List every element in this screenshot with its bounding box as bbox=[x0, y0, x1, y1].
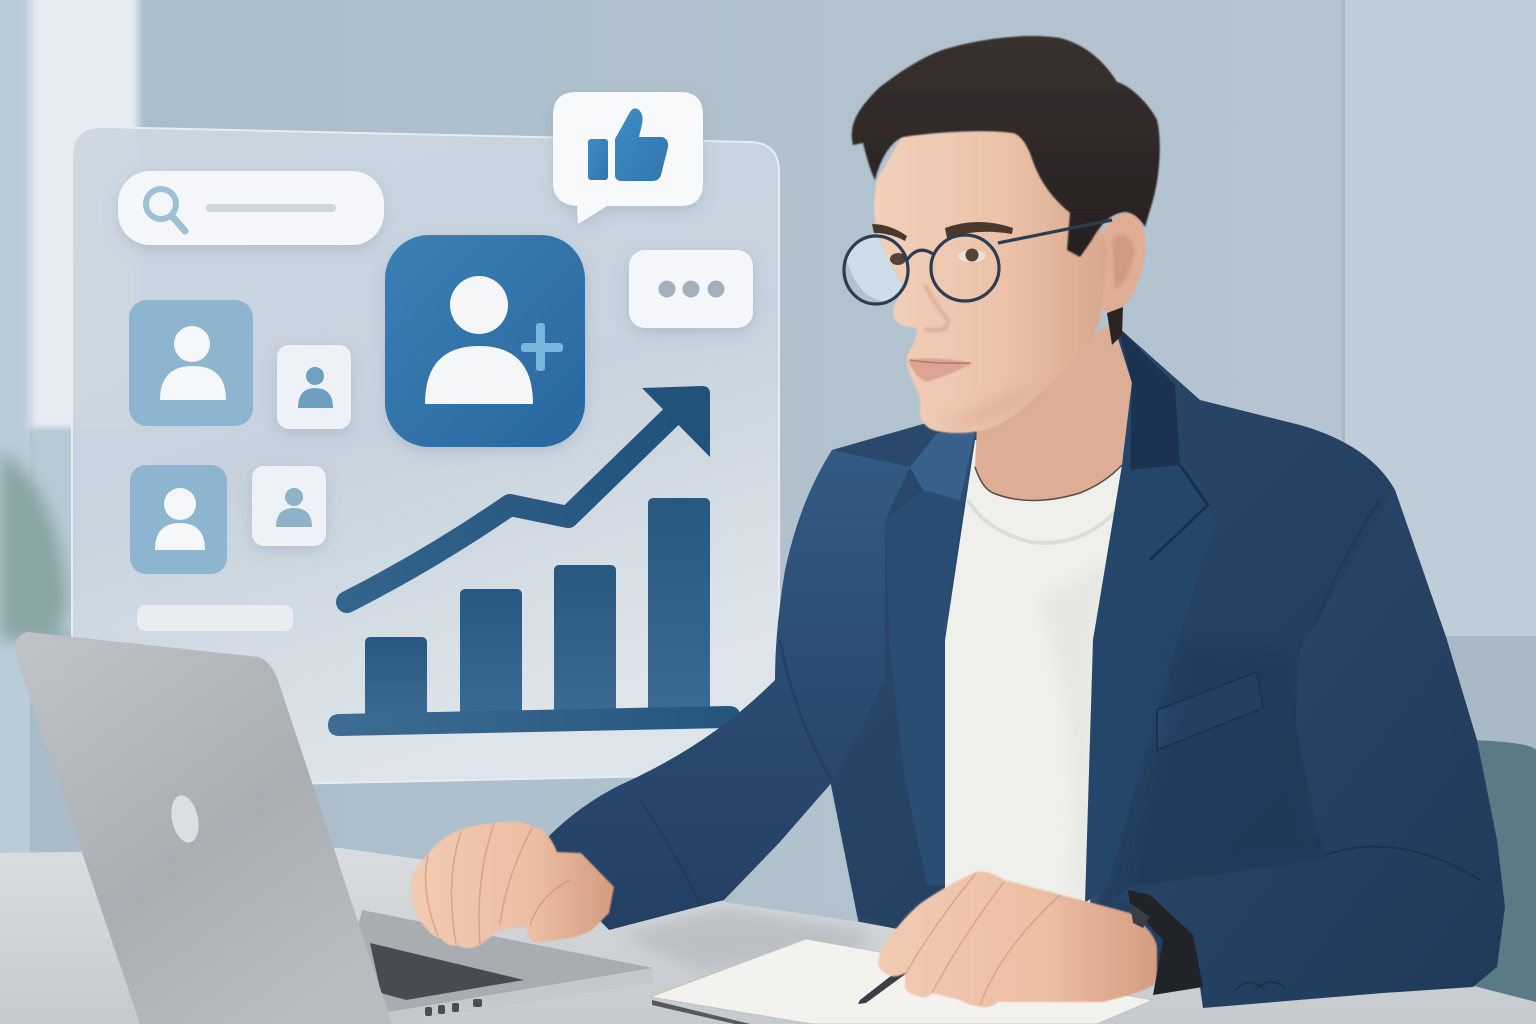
sleeve fold and buttons bbox=[1235, 847, 1480, 990]
jacket centre shade bbox=[1130, 640, 1320, 890]
sleeve seam bbox=[1295, 500, 1380, 847]
hand on laptop bbox=[411, 822, 614, 948]
laptop base bbox=[340, 910, 653, 1012]
speech bubble: ellipsis bbox=[629, 250, 753, 328]
laptop front edge bbox=[389, 968, 653, 1024]
chair bbox=[1465, 740, 1536, 1002]
glasses bbox=[844, 220, 1112, 304]
ear bbox=[1097, 213, 1145, 312]
eyebrows bbox=[872, 222, 1013, 241]
right collar shadow bbox=[1118, 327, 1180, 470]
eyes bbox=[890, 248, 986, 265]
left glasses lens tint bbox=[846, 236, 903, 302]
left sleeve bbox=[548, 450, 910, 930]
nose and mouth bbox=[908, 285, 973, 382]
left sleeve folds bbox=[640, 640, 832, 905]
lapel notch line bbox=[1150, 465, 1208, 560]
right lapel bbox=[1085, 327, 1215, 903]
notebook with pen bbox=[650, 939, 1153, 1024]
ear inner shading bbox=[1112, 234, 1135, 290]
panel: floating glass interface bbox=[72, 92, 779, 788]
placeholder text line bbox=[137, 605, 293, 631]
desk shadow bbox=[620, 908, 870, 970]
bar chart with rising arrow bbox=[328, 386, 740, 736]
desk bbox=[0, 848, 1536, 1024]
right sleeve bbox=[1107, 490, 1505, 1008]
hair behind ear bbox=[1107, 307, 1123, 345]
plant in background bbox=[0, 450, 68, 640]
icon: user tile large 1 bbox=[129, 300, 253, 426]
icon: user tile small 1 bbox=[277, 345, 351, 429]
left lapel highlight bbox=[910, 433, 975, 500]
laptop logo bbox=[167, 793, 203, 845]
person: torso and head bbox=[830, 36, 1460, 990]
icon: user tile large 2 bbox=[130, 465, 227, 574]
icon: thumbs up bbox=[588, 108, 668, 181]
search bar bbox=[118, 171, 384, 245]
keyboard bbox=[370, 943, 524, 1000]
left lapel bbox=[885, 433, 975, 885]
jacket pocket bbox=[1157, 672, 1263, 750]
t-shirt shading bbox=[1040, 560, 1110, 900]
wristwatch bbox=[1128, 890, 1203, 995]
arrow: growth trend bbox=[347, 416, 672, 602]
speech bubble: thumbs up bbox=[553, 92, 703, 224]
icon: add user tile bbox=[385, 235, 585, 447]
chin shadow bbox=[935, 390, 1040, 428]
hair bbox=[852, 36, 1160, 257]
laptop lid bbox=[15, 632, 392, 1024]
icon: user tile small 2 bbox=[252, 466, 326, 546]
collar line bbox=[975, 465, 1122, 500]
t-shirt collar rib bbox=[968, 500, 1115, 543]
laptop bbox=[15, 632, 653, 1024]
face bbox=[874, 130, 1108, 433]
ports bbox=[425, 999, 482, 1016]
neck bbox=[975, 323, 1132, 500]
torso blazer bbox=[830, 327, 1460, 990]
t-shirt bbox=[945, 440, 1125, 910]
icon: magnifying glass bbox=[146, 189, 185, 231]
hand on notebook bbox=[878, 872, 1157, 1007]
